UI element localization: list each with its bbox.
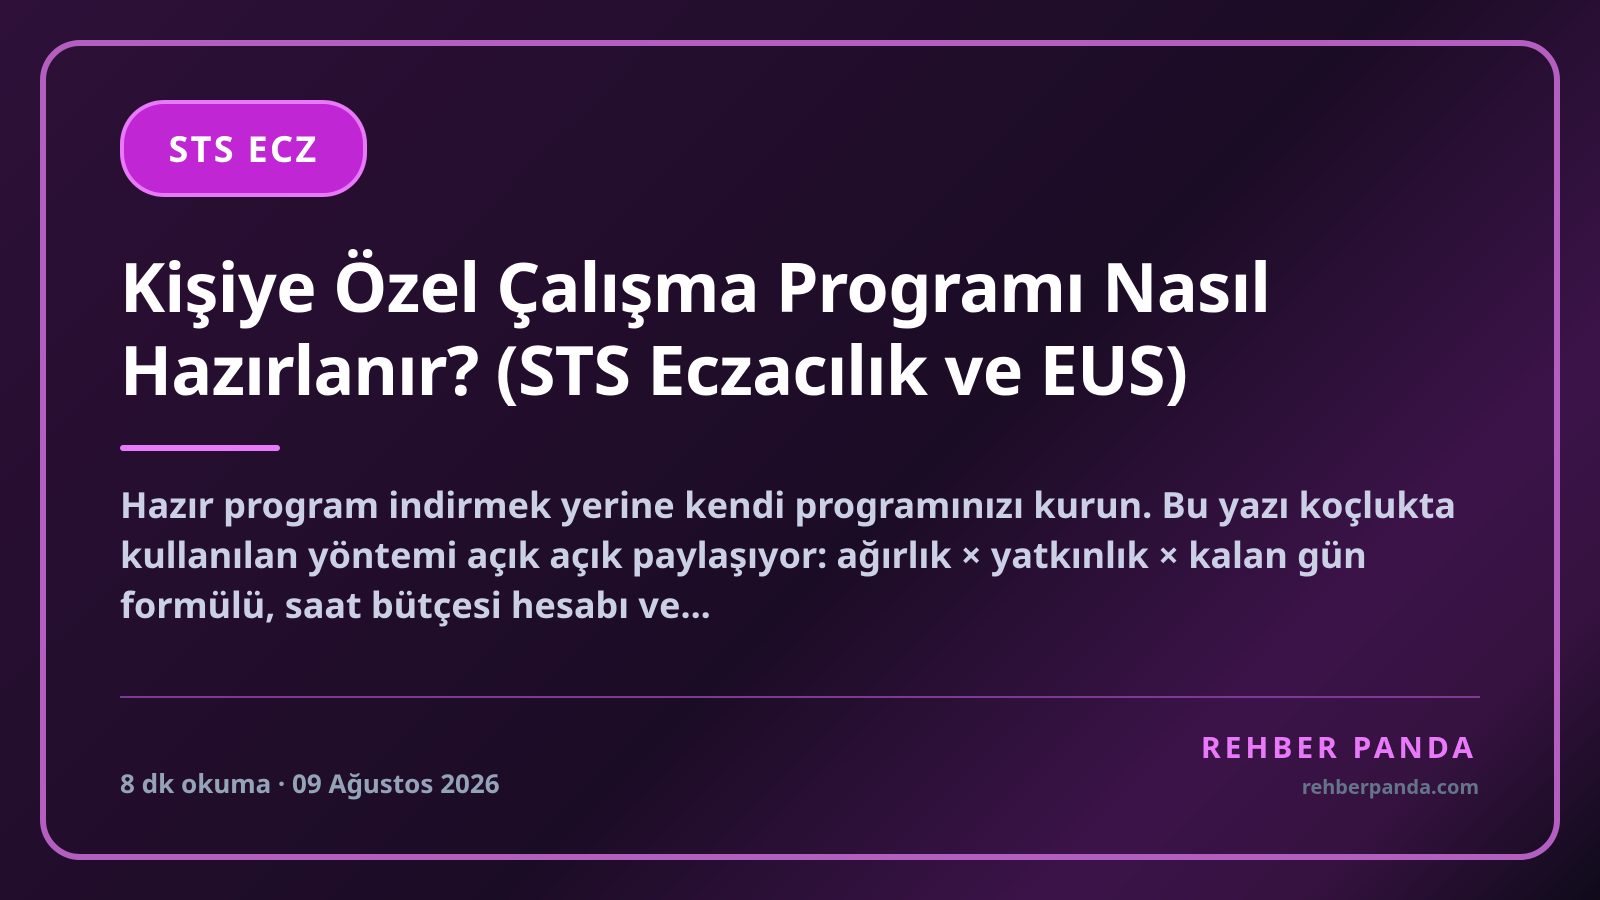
title: Kişiye Özel Çalışma Programı Nasıl (120, 239, 1270, 332)
description text (120, 480, 1456, 629)
accent bar (120, 445, 280, 451)
description text: formülü, saat bütçesi hesabı ve... (120, 580, 711, 629)
title: Hazırlanır? (STS Eczacılık ve EUS) (120, 322, 1187, 415)
badge: STS ECZ (120, 100, 367, 197)
divider (120, 696, 1480, 698)
brand name: REHBER PANDA (1201, 726, 1477, 767)
description text: Hazır program indirmek yerine kendi programınızı kurun. Bu yazı koçlukta (120, 480, 1456, 529)
title (120, 239, 1270, 415)
brand url: rehberpanda.com (1302, 773, 1479, 800)
badge: STS ECZ: STS ECZ (168, 124, 319, 173)
meta: reading time and date: 8 dk okuma · 09 Ağustos 2026 (120, 765, 500, 801)
description text: kullanılan yöntemi açık açık paylaşıyor: ağırlık × yatkınlık × kalan gün (120, 530, 1367, 579)
